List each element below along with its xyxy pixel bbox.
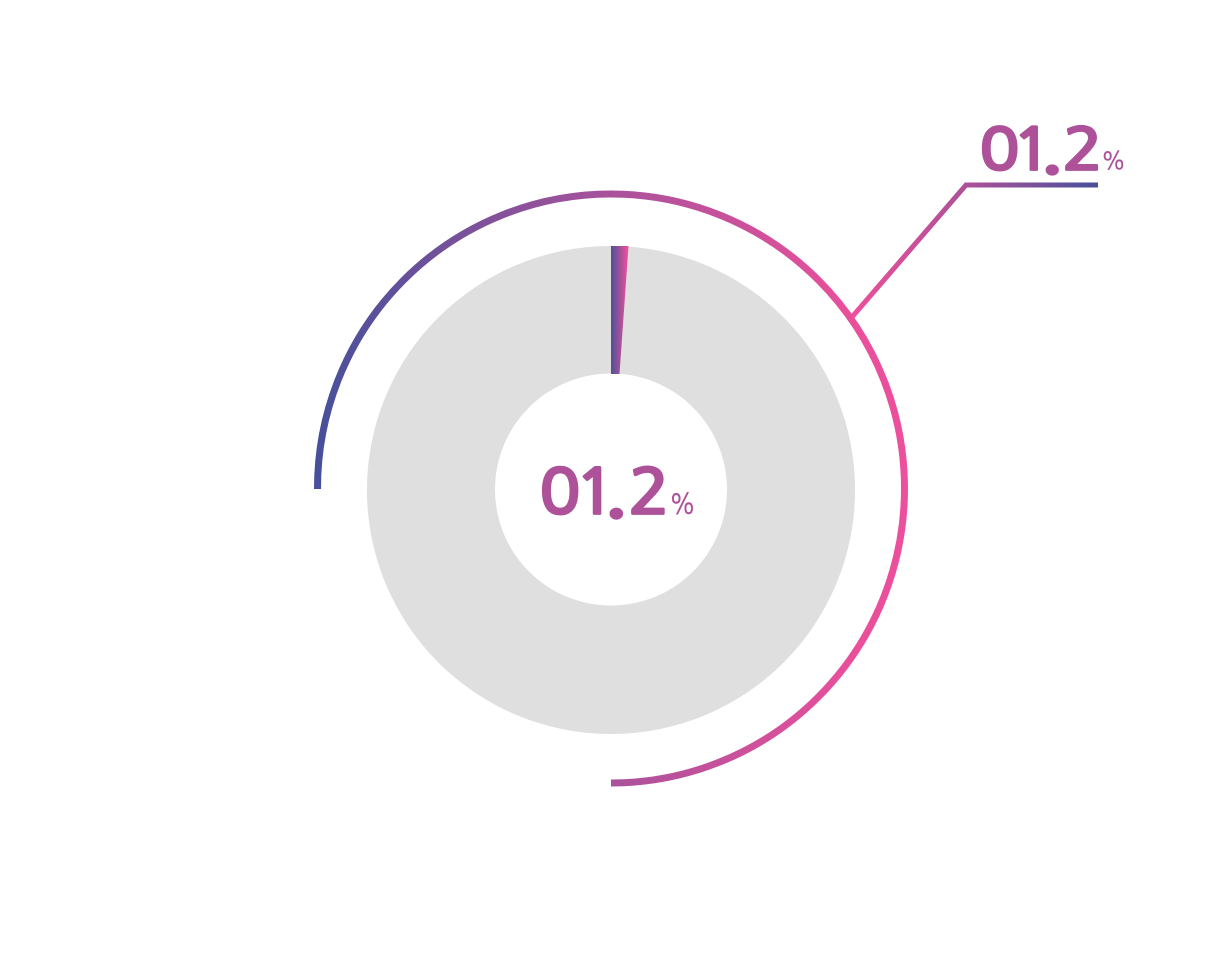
outer progress ring (317, 194, 904, 783)
center number: 01.2 (538, 462, 671, 525)
center value (538, 462, 696, 525)
callout value (978, 121, 1126, 180)
donut track (367, 246, 855, 734)
center percent sign: % (669, 491, 696, 519)
donut slice: 1.2% (611, 246, 628, 374)
callout number: 01.2 (978, 121, 1104, 180)
callout percent sign: % (1101, 150, 1126, 174)
leader line to callout (852, 185, 1098, 317)
